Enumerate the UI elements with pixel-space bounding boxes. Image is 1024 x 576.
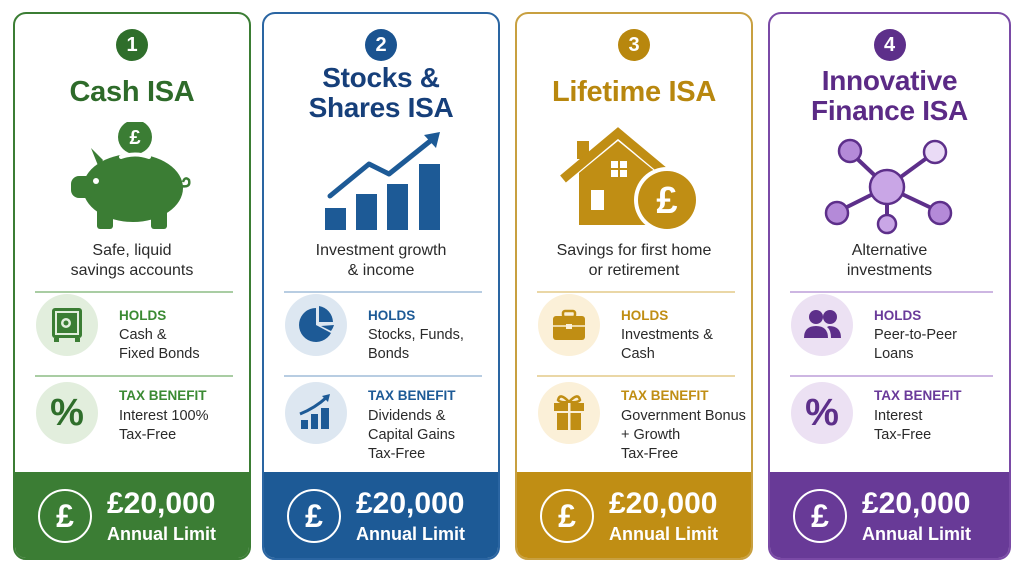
- label tax: TAX BENEFIT: [119, 388, 206, 403]
- number badge 4: 4: [884, 34, 895, 56]
- icon: pie chart: [285, 294, 347, 356]
- icon: house with pound: £: [656, 180, 678, 222]
- label: HOLDS: [621, 308, 668, 323]
- band: £: [811, 498, 829, 534]
- number badge 3: [618, 29, 650, 61]
- description: [557, 242, 711, 279]
- heading: Lifetime ISA: [552, 76, 716, 108]
- heading: Cash ISA: Cash ISA: [70, 76, 194, 108]
- icon: people: [791, 294, 853, 356]
- band: £: [305, 498, 323, 534]
- label: TAX BENEFIT: [621, 388, 708, 403]
- band: Annual Limit: [862, 524, 971, 544]
- text: Capital Gains: [368, 427, 455, 443]
- text: Loans: [874, 346, 914, 362]
- label: TAX BENEFIT: [368, 388, 456, 403]
- description: or retirement: [589, 262, 679, 279]
- description: [316, 242, 446, 279]
- icon: network nodes: [824, 138, 952, 234]
- icon: percent: %: [805, 392, 839, 434]
- text: [368, 327, 464, 362]
- heading: Innovative: [822, 65, 957, 96]
- text holds: Cash &: [119, 327, 167, 343]
- text: Investments &: [621, 327, 713, 343]
- text: Bonds: [368, 346, 409, 362]
- icon: safe: [36, 294, 98, 356]
- icon: percent: [36, 382, 98, 444]
- band: [264, 472, 498, 558]
- heading: Shares ISA: [309, 92, 453, 123]
- number badge 2: 2: [375, 34, 387, 56]
- text: [621, 327, 713, 362]
- text: + Growth: [621, 427, 680, 443]
- number badge 4: [874, 29, 906, 61]
- band: £20,000: [862, 487, 970, 520]
- band: annual limit: [15, 472, 249, 558]
- number badge 3: 3: [628, 34, 640, 56]
- icon: house with pound: [560, 127, 696, 229]
- text: Government Bonus: [621, 408, 746, 424]
- text holds: Fixed Bonds: [119, 346, 200, 362]
- text: Cash: [621, 346, 655, 362]
- panel: Cash ISA: [13, 12, 251, 560]
- label: HOLDS: [368, 308, 415, 323]
- text: Stocks, Funds,: [368, 327, 464, 343]
- band: annual limit: Annual Limit: [107, 524, 216, 544]
- band: £20,000: [356, 487, 464, 520]
- label holds: HOLDS: [119, 308, 166, 323]
- icon: piggy bank: [71, 122, 191, 229]
- heading: [309, 62, 453, 123]
- icon: percent: [791, 382, 853, 444]
- description: savings accounts: [71, 262, 193, 279]
- description: & income: [348, 262, 414, 279]
- band: £: [558, 498, 576, 534]
- description: Investment growth: [316, 242, 446, 259]
- heading: Finance ISA: [811, 95, 968, 126]
- text: Interest: [874, 408, 922, 424]
- heading: [811, 65, 968, 126]
- icon: rising bars: [285, 382, 347, 444]
- band: annual limit: £: [56, 498, 74, 534]
- number badge 2: [365, 29, 397, 61]
- text: [368, 408, 455, 462]
- description: Alternative: [852, 242, 927, 259]
- band: [517, 472, 751, 558]
- description: [71, 242, 193, 279]
- description: [847, 242, 932, 279]
- band: Annual Limit: [609, 524, 718, 544]
- text: Tax-Free: [621, 446, 678, 462]
- text tax: Interest 100%: [119, 408, 208, 424]
- label: TAX BENEFIT: [874, 388, 962, 403]
- description: Savings for first home: [557, 242, 711, 259]
- description: Safe, liquid: [92, 242, 172, 259]
- row: holds: [791, 294, 957, 362]
- row: tax benefit: [538, 382, 746, 462]
- row: tax benefit: [791, 382, 962, 444]
- icon: briefcase: [538, 294, 600, 356]
- band: annual limit: £20,000: [107, 487, 215, 520]
- panel: Innovative Finance ISA: [768, 12, 1011, 560]
- band: [770, 472, 1009, 558]
- text: [874, 327, 957, 362]
- text: Peer-to-Peer: [874, 327, 957, 343]
- text tax: [119, 408, 208, 443]
- icon: percent: %: [50, 392, 84, 434]
- panel: Stocks & Shares ISA: [262, 12, 500, 560]
- number badge 1: [116, 29, 148, 61]
- icon: gift: [538, 382, 600, 444]
- text: [874, 408, 931, 443]
- description: investments: [847, 262, 932, 279]
- row: tax benefit: [36, 382, 208, 444]
- icon: piggy bank: £: [129, 127, 141, 149]
- band: Annual Limit: [356, 524, 465, 544]
- text holds: [119, 327, 200, 362]
- text: Tax-Free: [368, 446, 425, 462]
- row: holds: [36, 294, 200, 362]
- number badge 1: 1: [126, 34, 138, 56]
- text: Dividends &: [368, 408, 445, 424]
- label: HOLDS: [874, 308, 921, 323]
- text: [621, 408, 746, 462]
- row: holds: [285, 294, 464, 362]
- text tax: Tax-Free: [119, 427, 176, 443]
- icon: growth chart: [325, 132, 440, 230]
- heading: Stocks &: [322, 62, 440, 93]
- text: Tax-Free: [874, 427, 931, 443]
- band: £20,000: [609, 487, 717, 520]
- panel: Lifetime ISA: [515, 12, 753, 560]
- row: tax benefit: [285, 382, 456, 462]
- row: holds: [538, 294, 713, 362]
